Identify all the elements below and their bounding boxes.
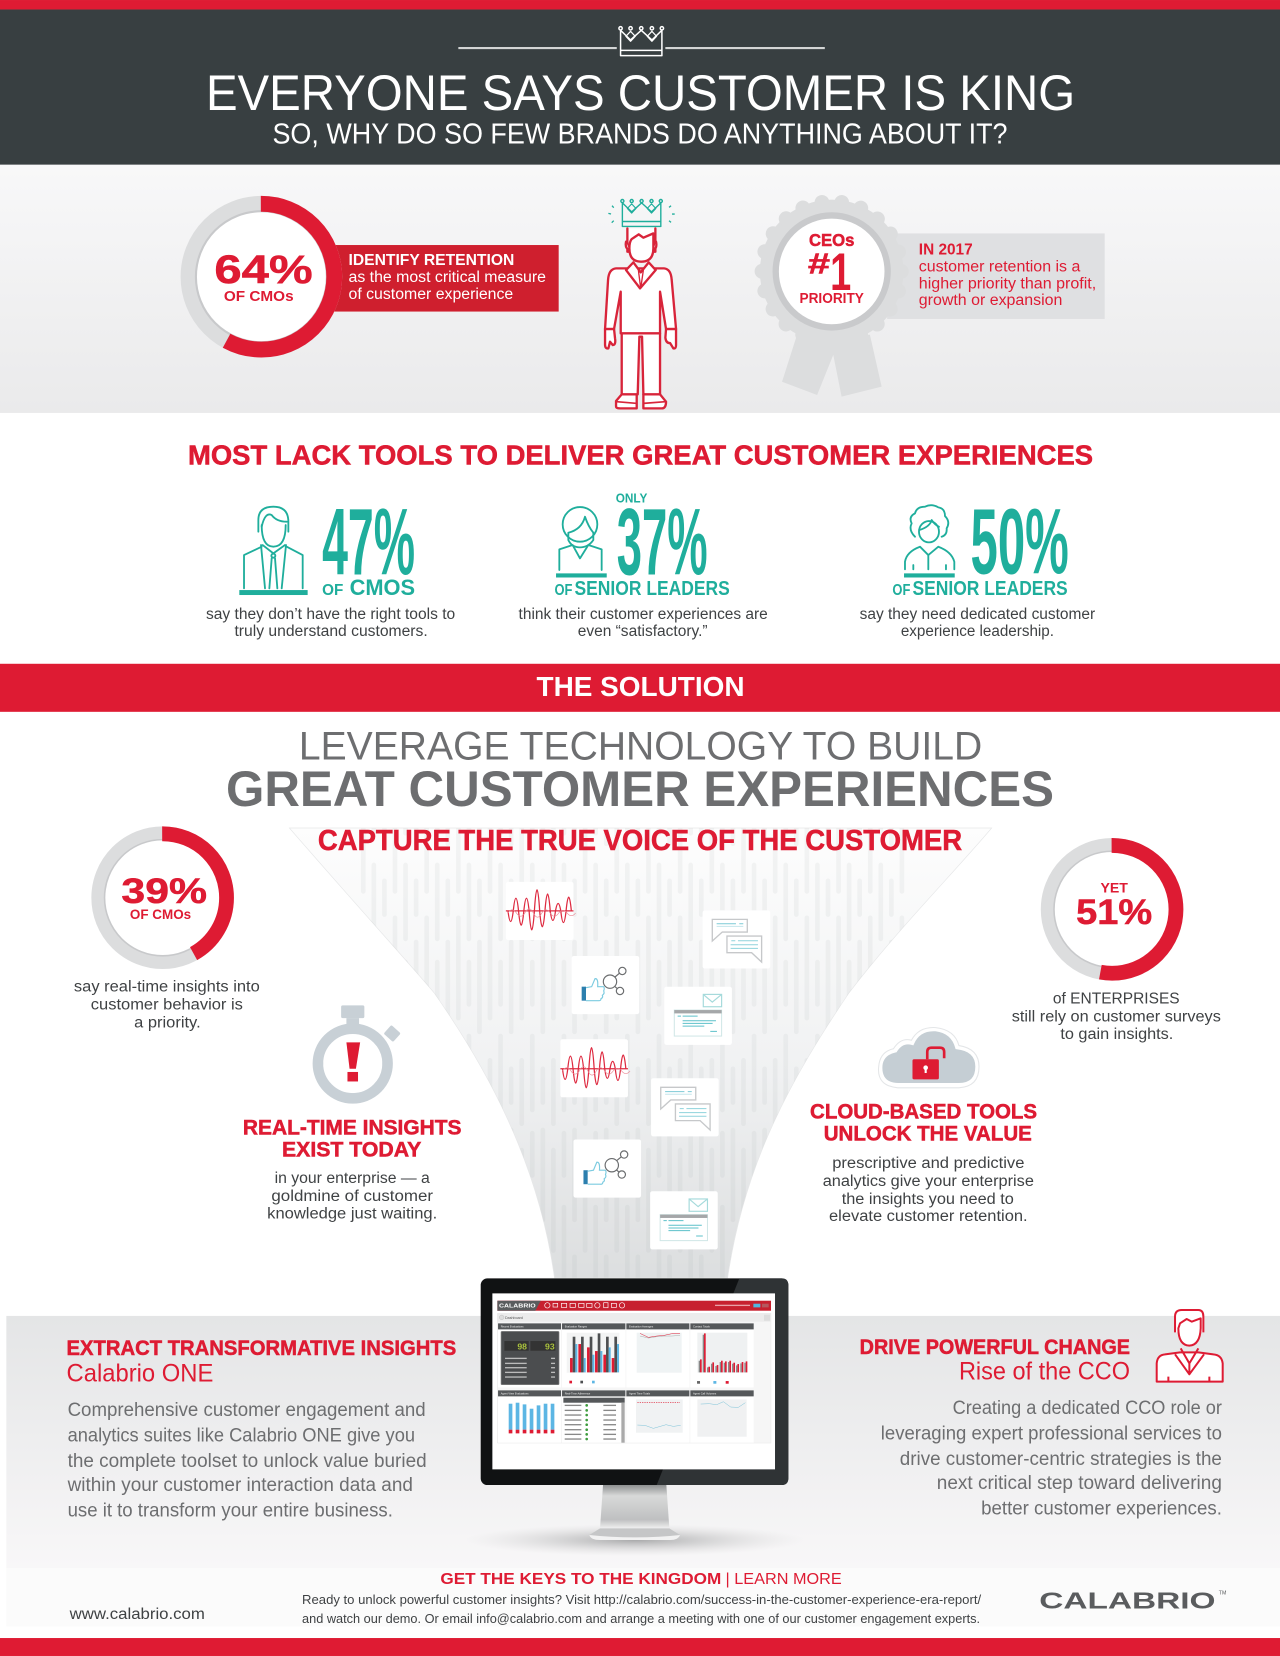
logo: calabrio: TM xyxy=(1219,1591,1226,1597)
description: experience leadership. xyxy=(901,623,1054,640)
icon: rosette badge: CEOs xyxy=(809,230,854,250)
icon card: like and share 2 xyxy=(573,1140,641,1198)
chart: 39 percent ring xyxy=(98,833,227,962)
description: truly understand customers. xyxy=(234,623,428,640)
panel: cloud-based tools xyxy=(810,1028,1037,1225)
panel: 37 percent of senior leaders xyxy=(519,490,768,640)
description xyxy=(1012,990,1221,1043)
description: knowledge just waiting. xyxy=(267,1206,437,1223)
footer: call to action: and watch our demo. Or email info@calabrio.com and arrange a meeting with one of our customer engagement experts. xyxy=(302,1612,980,1626)
description: analytics suites like Calabrio ONE give you xyxy=(68,1426,415,1447)
chart: 64 percent ring: 64% xyxy=(214,247,313,292)
heading: leverage technology: LEVERAGE TECHNOLOGY TO BUILD xyxy=(299,723,982,768)
description: analytics give your enterprise xyxy=(823,1173,1034,1190)
description: Creating a dedicated CCO role or xyxy=(953,1398,1223,1419)
panel: extract transformative insights xyxy=(67,1337,456,1522)
top red bar xyxy=(0,0,1280,10)
description xyxy=(519,606,768,640)
panel: 47 percent of CMOs: 47% xyxy=(322,490,415,596)
description xyxy=(74,979,260,1032)
label: of CMOs xyxy=(322,575,415,600)
icon: stopwatch xyxy=(318,1005,401,1098)
panel: 39 percent of CMOs xyxy=(74,833,260,1032)
heading xyxy=(810,1100,1037,1146)
icon: rosette badge: PRIORITY xyxy=(799,291,864,307)
dashboard screen: Agent Time Totals xyxy=(629,1391,651,1395)
callout: in 2017: customer retention is a xyxy=(919,258,1081,275)
chart: 51 percent ring xyxy=(1048,845,1177,974)
panel: drive powerful change xyxy=(860,1310,1223,1519)
panel: retention stats xyxy=(0,165,1280,413)
dashboard screen: Evaluation Ranges xyxy=(565,1324,588,1328)
dashboard screen: Agent View Evaluations xyxy=(501,1391,529,1395)
description: think their customer experiences are xyxy=(519,606,768,623)
description: a priority. xyxy=(134,1015,201,1032)
icon base bar xyxy=(239,590,308,595)
icon card: like and share 1 xyxy=(572,956,639,1014)
heading xyxy=(860,1336,1130,1385)
description xyxy=(67,1400,427,1522)
icon: crown with rules xyxy=(458,27,825,56)
dashboard screen: Agent Call Volumes xyxy=(693,1391,717,1395)
icon: man in suit xyxy=(244,507,303,588)
heading xyxy=(67,1337,456,1387)
callout: identify retention: as the most critical measure xyxy=(349,269,546,286)
panel: 51 percent of enterprises xyxy=(1012,845,1221,1043)
heading: EXTRACT TRANSFORMATIVE INSIGHTS xyxy=(67,1337,456,1360)
stat: 50 percent: 50% xyxy=(971,489,1069,593)
icon card: waveform 1 xyxy=(506,882,576,940)
label: of senior leaders: SENIOR LEADERS xyxy=(912,578,1068,600)
icon: cloud with open lock xyxy=(878,1028,979,1088)
label: of senior leaders: OF xyxy=(554,582,573,599)
callout: in 2017: growth or expansion xyxy=(919,292,1062,309)
monitor stand xyxy=(589,1485,680,1540)
heading: UNLOCK THE VALUE xyxy=(824,1123,1032,1146)
heading: Calabrio ONE xyxy=(67,1359,213,1387)
subtitle: SO, WHY DO SO FEW BRANDS DO ANYTHING ABOUT IT? xyxy=(272,119,1008,151)
heading: Rise of the CCO xyxy=(959,1357,1130,1385)
icon base bar xyxy=(904,573,955,577)
icon card: email 1 xyxy=(664,987,732,1045)
description xyxy=(881,1398,1223,1519)
description: customer behavior is xyxy=(91,997,243,1014)
description xyxy=(206,606,455,640)
title: EVERYONE SAYS CUSTOMER IS KING xyxy=(206,65,1075,121)
logo: calabrio xyxy=(1039,1587,1226,1613)
panel: 37 percent of senior leaders: 37% xyxy=(617,490,708,596)
chart: 39 percent ring: OF CMOs xyxy=(130,907,192,922)
description: say real-time insights into xyxy=(74,979,260,996)
icon card: chat 2 xyxy=(651,1078,719,1136)
description: use it to transform your entire business. xyxy=(68,1501,393,1522)
dashboard screen: 98 xyxy=(517,1341,527,1351)
dashboard screen: Recent Evaluations xyxy=(501,1324,524,1328)
heading: most lack tools: MOST LACK TOOLS TO DELIVER GREAT CUSTOMER EXPERIENCES xyxy=(188,440,1093,471)
bottom section background xyxy=(6,1316,1280,1626)
description: in your enterprise — a xyxy=(275,1170,430,1187)
dashboard screen: Evaluation Averages xyxy=(629,1324,654,1328)
description: of ENTERPRISES xyxy=(1053,990,1180,1007)
funnel: voice of the customer xyxy=(289,828,992,1278)
chart: 51 percent ring: 51% xyxy=(1076,893,1152,932)
icon card: email 2 xyxy=(650,1191,718,1249)
footer: call to action: Ready to unlock powerful customer insights? Visit http://calabrio.com/success-in-the-customer-experience-era-report/ xyxy=(302,1593,982,1607)
monitor shadow xyxy=(465,1524,805,1556)
icon: chief customer officer xyxy=(1157,1310,1223,1382)
description: even “satisfactory.” xyxy=(578,623,708,640)
description: prescriptive and predictive xyxy=(832,1155,1025,1172)
callout: in 2017: higher priority than profit, xyxy=(919,275,1096,292)
heading: capture the true voice: CAPTURE THE TRUE VOICE OF THE CUSTOMER xyxy=(318,825,962,857)
heading: CLOUD-BASED TOOLS xyxy=(810,1100,1037,1123)
chart: 51 percent ring: YET xyxy=(1100,880,1129,895)
callout: identify retention xyxy=(333,245,559,312)
description: still rely on customer surveys xyxy=(1012,1008,1221,1025)
heading: REAL-TIME INSIGHTS xyxy=(243,1116,462,1139)
description: goldmine of customer xyxy=(271,1188,434,1205)
callout: identify retention: of customer experience xyxy=(349,286,513,303)
chart: 64 percent ring xyxy=(189,204,334,350)
header panel xyxy=(0,10,1280,165)
icon: curly hair person xyxy=(905,505,954,569)
monitor with dashboard xyxy=(465,1278,805,1556)
panel: 47 percent of CMOs xyxy=(206,490,455,640)
icon: rosette badge: # xyxy=(808,249,830,281)
description: the insights you need to xyxy=(842,1191,1014,1208)
description xyxy=(860,606,1096,640)
icon: woman xyxy=(559,507,602,570)
label: only: ONLY xyxy=(616,492,648,506)
description: say they don’t have the right tools to xyxy=(206,606,455,623)
dashboard screen xyxy=(497,1301,771,1443)
description: the complete toolset to unlock value buried xyxy=(68,1451,427,1472)
dashboard screen: Real-Time Adherence xyxy=(565,1391,591,1395)
dashboard screen: Dashboard xyxy=(505,1316,523,1320)
heading xyxy=(243,1116,462,1161)
label: of CMOs: CMOS xyxy=(350,575,415,600)
panel: 50 percent of senior leaders xyxy=(860,489,1096,640)
description: leveraging expert professional services to xyxy=(881,1423,1222,1444)
description: next critical step toward delivering xyxy=(937,1473,1222,1494)
footer: call to action xyxy=(302,1571,982,1626)
panel: real-time insights xyxy=(243,1005,462,1223)
icon: rosette badge: 1 xyxy=(830,243,851,302)
footer: call to action: | LEARN MORE xyxy=(726,1571,842,1588)
icon card: waveform 2 xyxy=(560,1039,630,1097)
description xyxy=(823,1155,1034,1225)
description xyxy=(267,1170,437,1223)
icon card: chat 1 xyxy=(703,910,770,968)
label: of senior leaders: OF xyxy=(892,582,911,599)
callout: in 2017: IN 2017 xyxy=(919,242,973,259)
heading: DRIVE POWERFUL CHANGE xyxy=(860,1336,1130,1359)
icon base bar xyxy=(556,573,607,577)
dashboard screen: CALABRIO xyxy=(499,1304,536,1310)
callout: in 2017 xyxy=(887,233,1105,319)
description: to gain insights. xyxy=(1060,1026,1173,1043)
monitor frame xyxy=(481,1278,788,1485)
heading: leverage technology xyxy=(226,723,1054,817)
chart: 64 percent ring: OF CMOs xyxy=(224,289,294,305)
footer: call to action: GET THE KEYS TO THE KINGDOM xyxy=(440,1571,721,1588)
heading: EXIST TODAY xyxy=(282,1138,421,1161)
description: say they need dedicated customer xyxy=(860,606,1096,623)
description: elevate customer retention. xyxy=(829,1208,1028,1225)
icon: king figure with crown xyxy=(605,199,676,408)
chart: 39 percent ring: 39% xyxy=(121,872,207,911)
dashboard screen: 93 xyxy=(545,1341,555,1351)
dashboard screen: Contact Totals xyxy=(693,1324,710,1328)
description: drive customer-centric strategies is the xyxy=(900,1449,1222,1470)
logo: calabrio: CALABRIO xyxy=(1039,1587,1216,1613)
bottom red bar xyxy=(0,1638,1280,1656)
icon: rosette badge xyxy=(760,200,903,397)
description: Comprehensive customer engagement and xyxy=(68,1400,426,1421)
label: of senior leaders: SENIOR LEADERS xyxy=(575,578,730,600)
heading: leverage technology: GREAT CUSTOMER EXPERIENCES xyxy=(226,761,1054,817)
banner: the solution xyxy=(0,664,1280,712)
callout: identify retention: IDENTIFY RETENTION xyxy=(349,252,514,269)
description: better customer experiences. xyxy=(981,1498,1222,1519)
footer: website: www.calabrio.com xyxy=(69,1606,205,1623)
banner: the solution: THE SOLUTION xyxy=(537,671,745,702)
label: of CMOs: OF xyxy=(322,582,344,599)
description: within your customer interaction data and xyxy=(67,1475,413,1496)
